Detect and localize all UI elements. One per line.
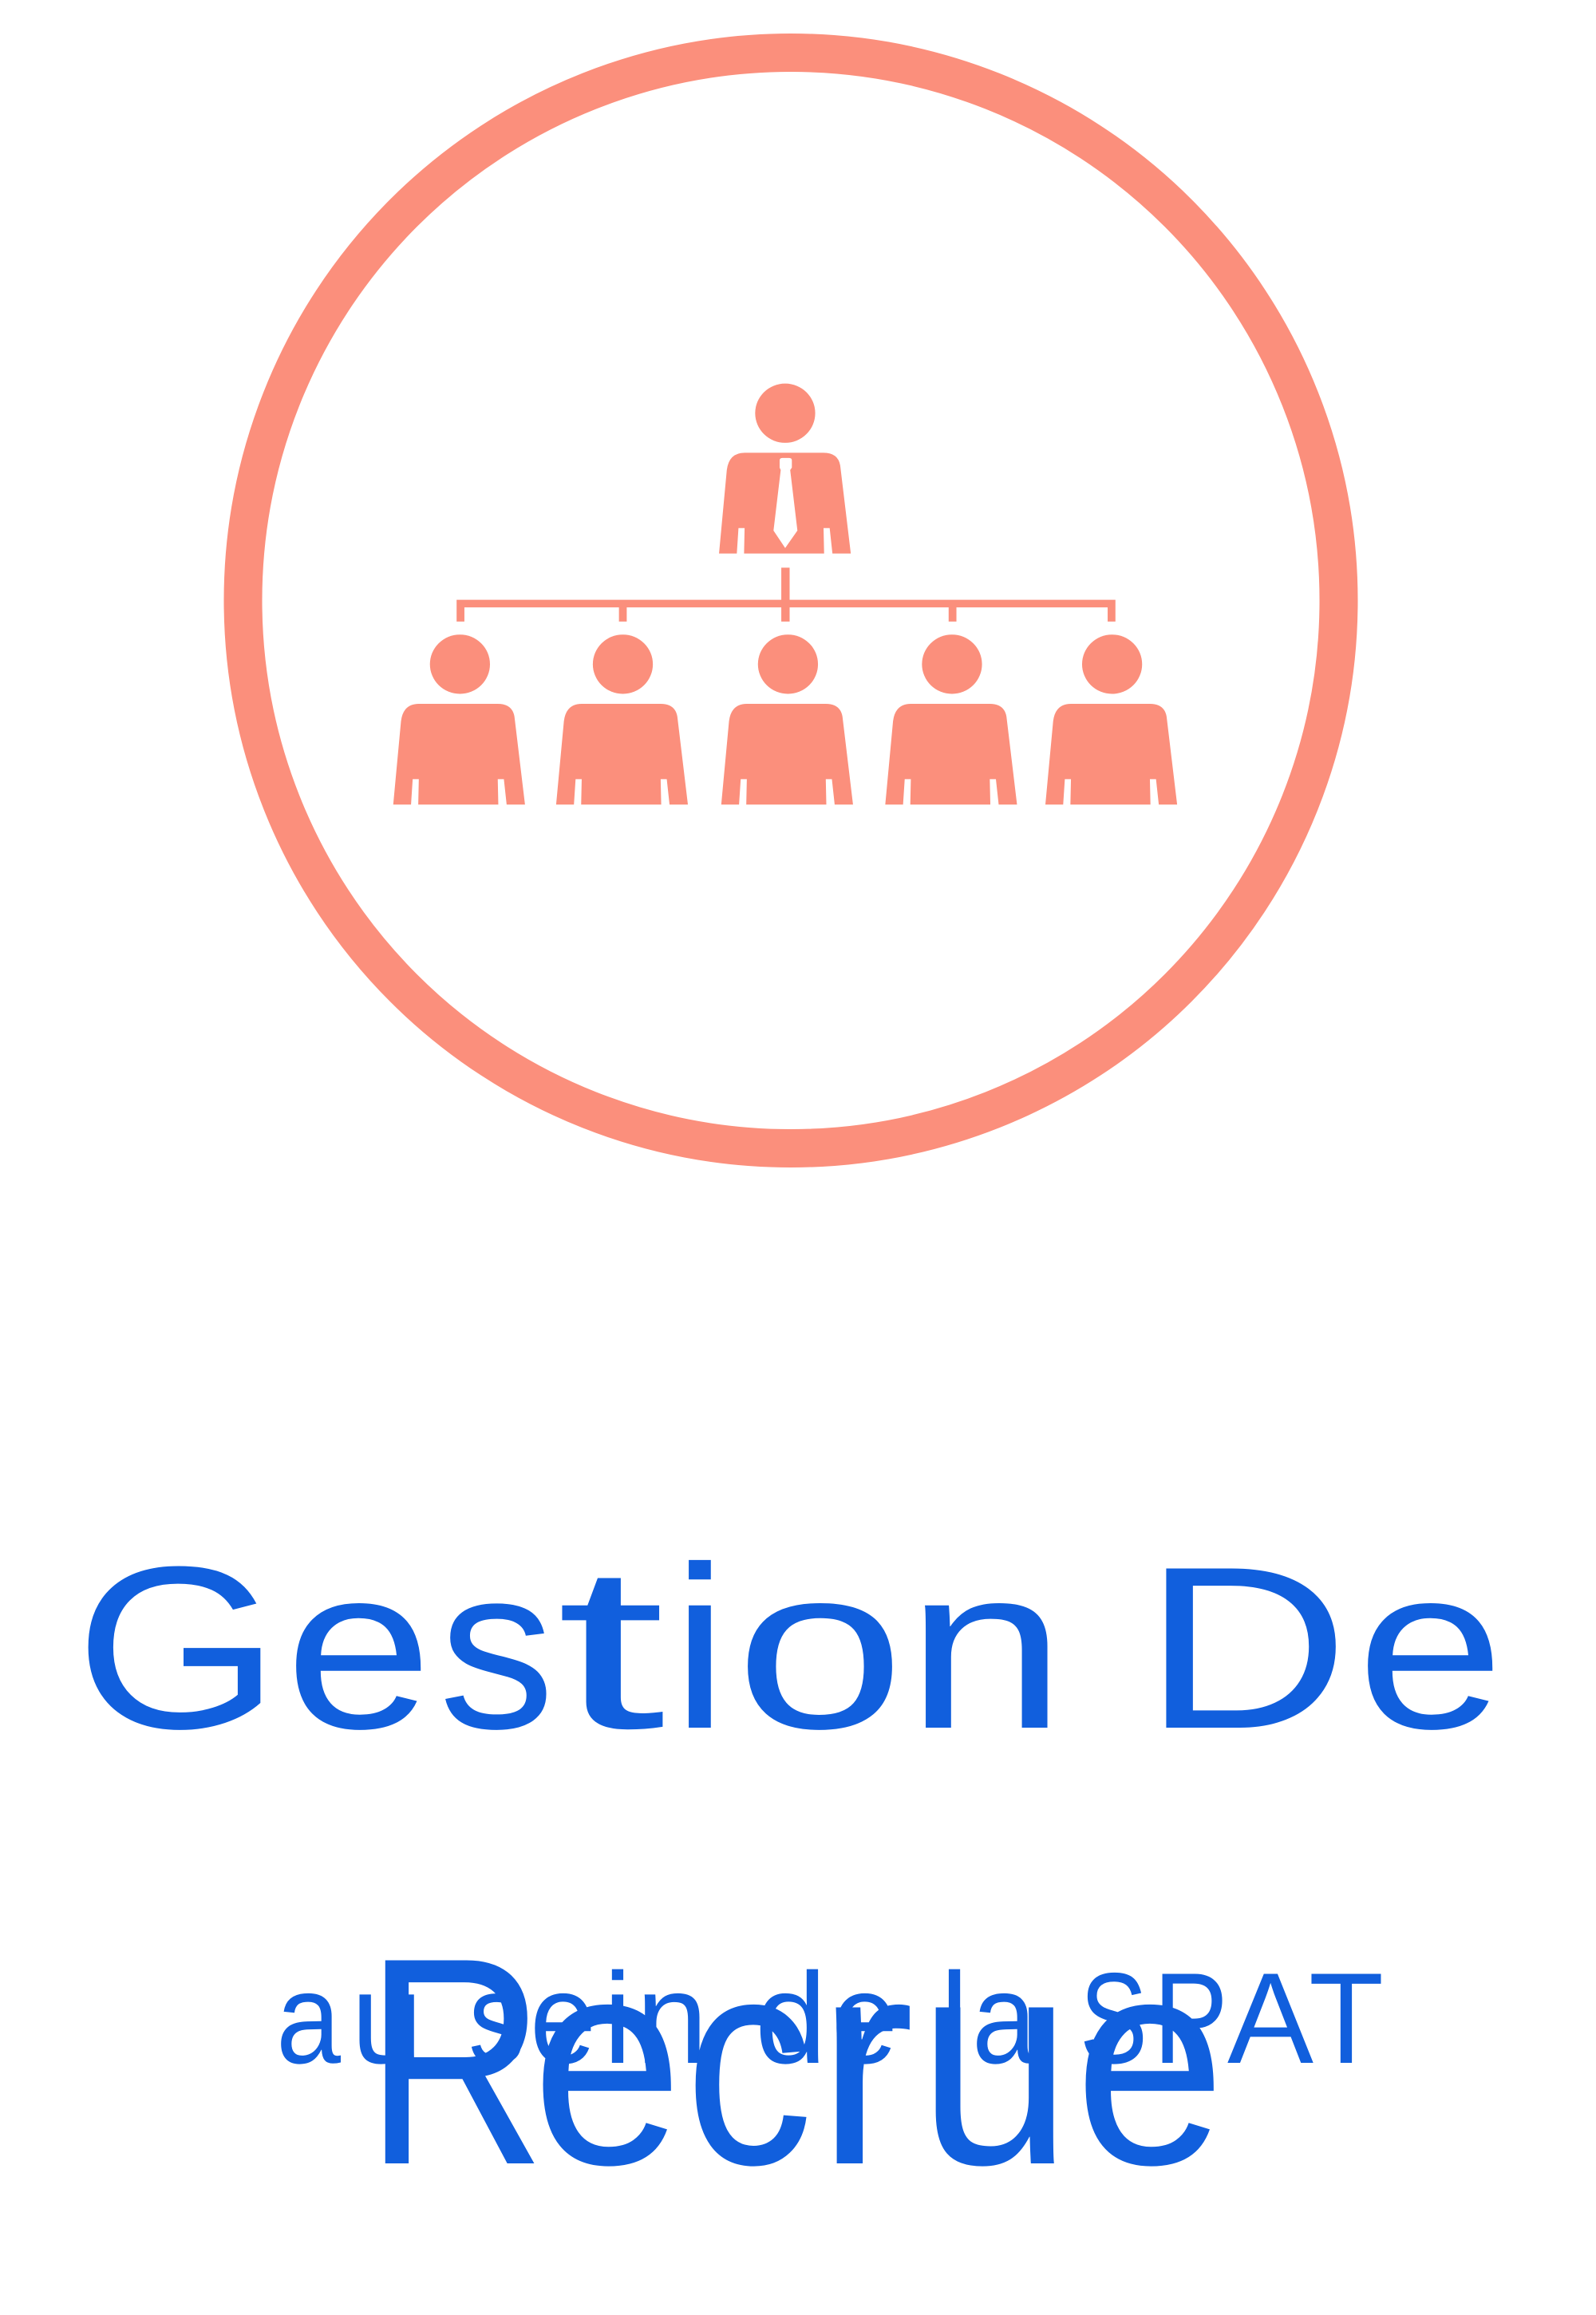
subheading: au sein de la SPAT: s — [468, 1946, 525, 2091]
subheading: au sein de la SPAT: A — [1227, 1946, 1314, 2091]
icon: team member 3 — [721, 634, 853, 804]
heading: Recrue: c — [685, 1897, 813, 2226]
icon: organisation hierarchy — [393, 384, 1177, 804]
subheading: au sein de la SPAT: u — [351, 1946, 423, 2091]
subheading: au sein de la SPAT: S — [1080, 1946, 1148, 2091]
subheading: au sein de la SPAT: d — [755, 1946, 827, 2091]
heading: Recrue: r — [816, 1897, 915, 2226]
icon: team member 5 — [1045, 634, 1177, 804]
heading: Gestion De: o — [735, 1519, 905, 1777]
heading: Recrue: R — [365, 1897, 546, 2226]
heading: Gestion De: i — [672, 1519, 728, 1777]
heading: Gestion De: e — [285, 1519, 433, 1777]
subheading: au sein de la SPAT: a — [972, 1946, 1037, 2091]
heading: Gestion De: s — [439, 1519, 555, 1777]
icon: team member 4 — [885, 634, 1017, 804]
icon: team member 1 — [393, 634, 525, 804]
subheading: au sein de la SPAT: T — [1309, 1946, 1384, 2091]
icon: manager — [719, 384, 851, 554]
heading: Recrue: u — [918, 1897, 1073, 2226]
subheading: au sein de la SPAT: n — [636, 1946, 708, 2091]
heading: Gestion De: n — [906, 1519, 1066, 1777]
subheading: au sein de la SPAT: e — [530, 1946, 596, 2091]
heading: Gestion De: D — [1143, 1519, 1349, 1777]
icon: team member 2 — [556, 634, 688, 804]
subheading: au sein de la SPAT: l — [940, 1946, 969, 2091]
heading: Gestion De: G — [75, 1519, 280, 1777]
subheading: au sein de la SPAT: P — [1153, 1946, 1228, 2091]
subheading: au sein de la SPAT: a — [276, 1946, 342, 2091]
subheading: au sein de la SPAT: e — [832, 1946, 898, 2091]
heading: Gestion De: e — [1357, 1519, 1504, 1777]
heading: Gestion De: t — [556, 1519, 667, 1777]
heading: Recrue: e — [1074, 1897, 1226, 2226]
ring — [243, 53, 1339, 1148]
subheading: au sein de la SPAT: i — [603, 1946, 632, 2091]
heading: Recrue: e — [531, 1897, 683, 2226]
connector lines — [456, 567, 1116, 622]
